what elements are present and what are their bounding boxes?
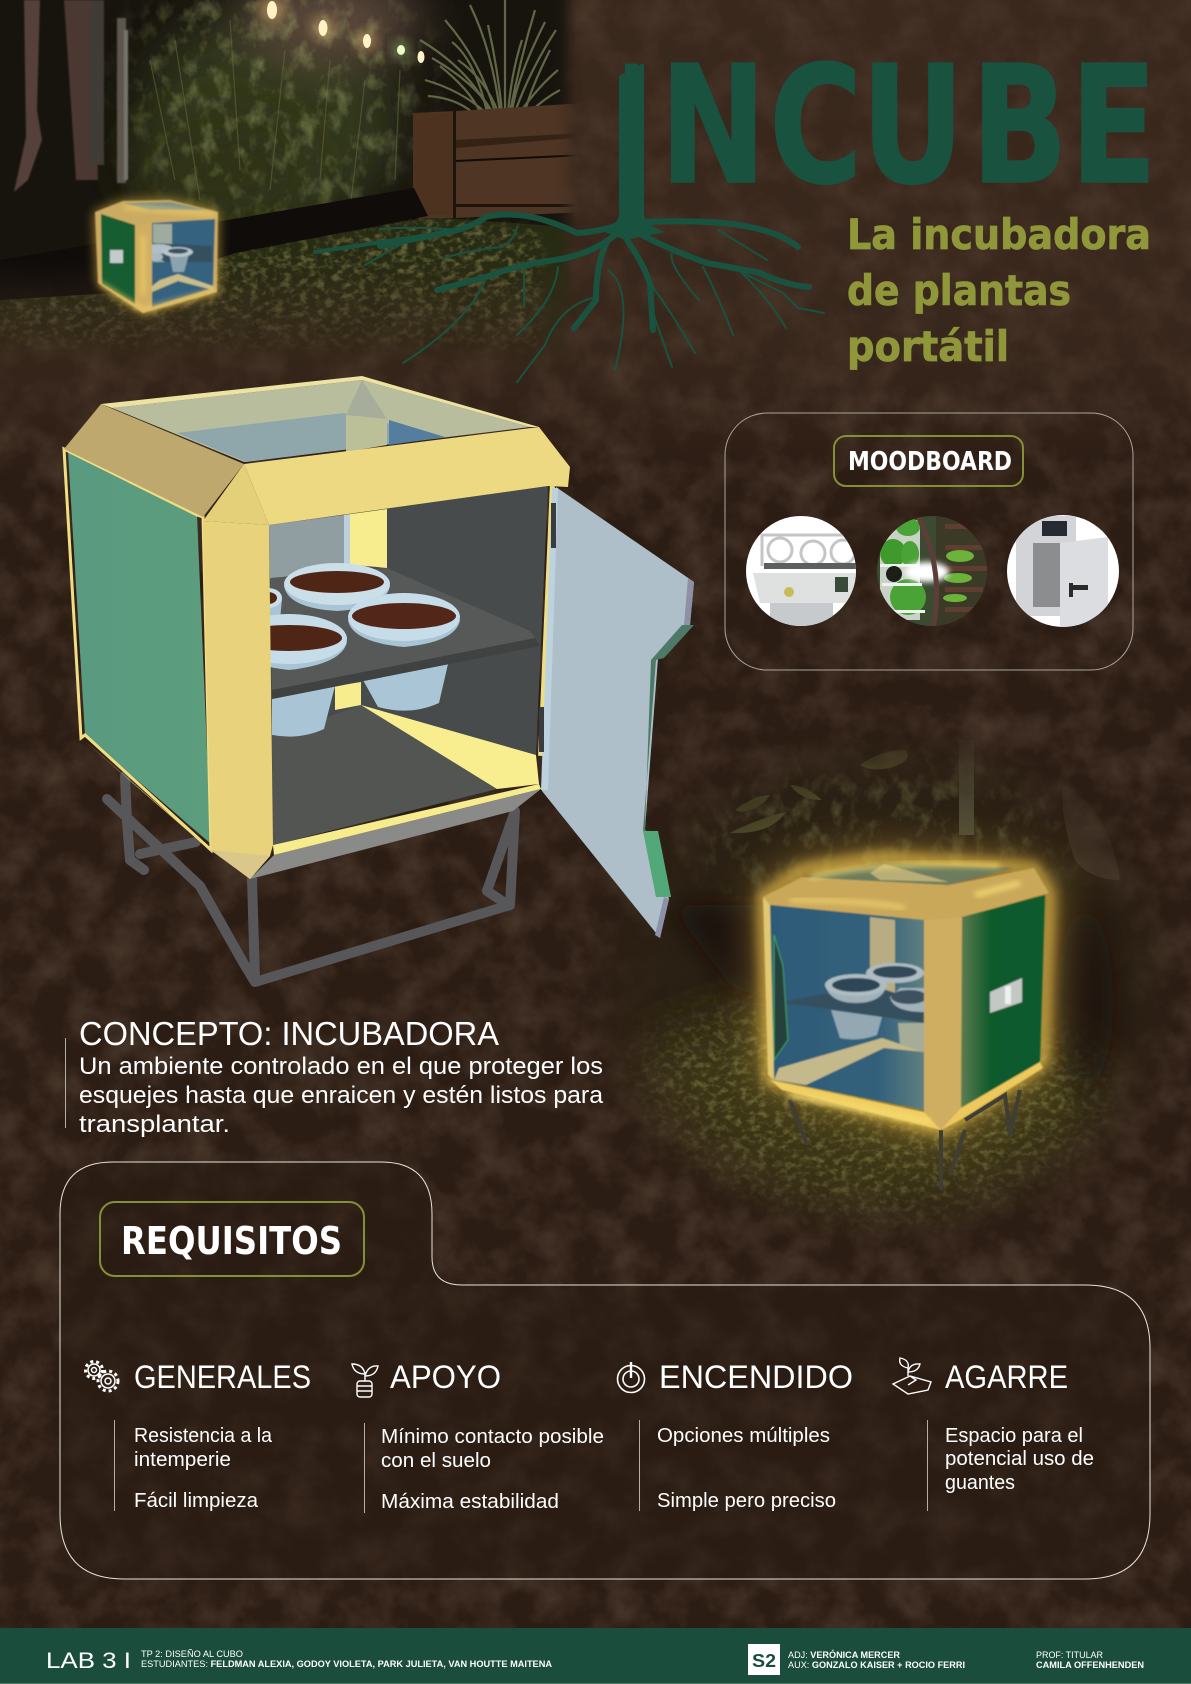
column: generales: GENERALES bbox=[134, 1359, 311, 1395]
subtitle: La incubadora bbox=[847, 210, 1151, 259]
teaching assistants: ADJ: VERÓNICA MERCER bbox=[788, 1649, 900, 1660]
door bbox=[541, 487, 694, 938]
shelf bbox=[270, 568, 541, 699]
column: generales: Resistencia a la bbox=[134, 1425, 273, 1447]
title: I bbox=[619, 27, 644, 219]
column: agarre: AGARRE bbox=[945, 1359, 1068, 1395]
subtitle bbox=[847, 210, 1151, 371]
small glowing cube in garden bbox=[95, 200, 218, 313]
requisitos label: REQUISITOS bbox=[121, 1219, 342, 1263]
hinges bbox=[539, 503, 556, 752]
column: encendido bbox=[618, 1359, 853, 1512]
photo: garden at night with small glowing cube bbox=[0, 0, 574, 347]
front post bbox=[203, 521, 273, 879]
title: NCUBE bbox=[660, 31, 1157, 221]
requisitos label bbox=[100, 1202, 364, 1276]
concept text block: Un ambiente controlado en el que proteger los bbox=[79, 1053, 603, 1080]
icon: hand holding plant bbox=[893, 1358, 931, 1394]
column: encendido: Opciones múltiples bbox=[657, 1425, 830, 1447]
metal stand bbox=[107, 776, 515, 982]
column: apoyo: con el suelo bbox=[381, 1450, 491, 1472]
panel: requisitos bbox=[60, 1162, 1150, 1579]
moodboard label bbox=[834, 436, 1023, 486]
column: apoyo: Máxima estabilidad bbox=[381, 1491, 559, 1513]
course label: LAB 3 I bbox=[46, 1648, 131, 1673]
interior back and walls bbox=[269, 486, 548, 845]
frame front corner bbox=[203, 464, 269, 525]
head professor: CAMILA OFFENHENDEN bbox=[1036, 1660, 1144, 1670]
column: generales bbox=[86, 1359, 311, 1512]
badge S2: S2 bbox=[752, 1651, 776, 1671]
door handle strip bbox=[643, 625, 694, 897]
column: agarre: guantes bbox=[945, 1472, 1015, 1494]
interior floor bbox=[272, 705, 497, 845]
concept text block bbox=[65, 1015, 604, 1138]
column: apoyo: Mínimo contacto posible bbox=[381, 1426, 604, 1448]
root logo: stem of the I and roots bbox=[315, 63, 824, 382]
foliage stems bbox=[150, 20, 400, 210]
project and students bbox=[141, 1649, 553, 1669]
pots lower bodies bbox=[272, 664, 448, 737]
pots with soil bbox=[231, 563, 460, 670]
column: encendido: ENCENDIDO bbox=[659, 1359, 853, 1395]
moodboard label: MOODBOARD bbox=[848, 447, 1012, 477]
subtitle: portátil bbox=[847, 322, 1009, 371]
icon: power button bbox=[618, 1362, 644, 1392]
subtitle: de plantas bbox=[847, 266, 1071, 315]
wooden planter bbox=[413, 103, 585, 218]
head professor bbox=[1036, 1650, 1144, 1670]
frame chamfer left bbox=[64, 404, 244, 517]
photo: night grass with glowing cube bbox=[630, 749, 1156, 1231]
moodboard panel bbox=[725, 413, 1133, 670]
moodboard image: vertical hydroponic drum bbox=[877, 516, 988, 628]
ornamental grass bbox=[420, 0, 560, 112]
black garden edging bbox=[0, 188, 428, 300]
main 3D incubator render bbox=[64, 376, 694, 982]
moodboard image: neonatal incubator bbox=[746, 516, 856, 627]
project and students: TP 2: DISEÑO AL CUBO bbox=[141, 1649, 243, 1659]
background plant bbox=[730, 748, 974, 835]
column: generales: Fácil limpieza bbox=[134, 1490, 259, 1512]
string lights bbox=[258, 0, 424, 63]
column: apoyo: APOYO bbox=[390, 1359, 501, 1395]
column: generales: intemperie bbox=[134, 1449, 231, 1471]
shadow behind cube bbox=[675, 896, 762, 1004]
cube pots bbox=[825, 963, 927, 1052]
badge S2 bbox=[748, 1644, 780, 1675]
cube legs bbox=[790, 1090, 1020, 1190]
concept text block: esquejes hasta que enraicen y estén listos para bbox=[79, 1082, 604, 1109]
bottom rim and underside bbox=[273, 784, 541, 855]
left green panel bbox=[68, 452, 211, 844]
glass roof bbox=[112, 380, 530, 462]
footer band bbox=[0, 1628, 1191, 1684]
concept text block: transplantar. bbox=[79, 1111, 230, 1138]
column: encendido: Simple pero preciso bbox=[657, 1490, 836, 1512]
moodboard image: laboratory oven bbox=[1006, 514, 1120, 628]
concept text block: CONCEPTO: INCUBADORA bbox=[79, 1015, 499, 1052]
large leaf bbox=[1063, 804, 1120, 880]
trunks and pipe bbox=[14, 0, 128, 192]
column: apoyo bbox=[352, 1359, 604, 1513]
teaching assistants bbox=[788, 1649, 965, 1670]
column: agarre bbox=[893, 1358, 1094, 1511]
column: agarre: Espacio para el bbox=[945, 1425, 1083, 1447]
column: agarre: potencial uso de bbox=[945, 1448, 1094, 1470]
icon: seedling in pot bbox=[352, 1364, 378, 1397]
frame top bar bbox=[244, 427, 570, 525]
project and students: ESTUDIANTES: FELDMAN ALEXIA, GODOY VIOLETA, PARK JULIETA, VAN HOUTTE MAITENA bbox=[141, 1659, 553, 1669]
head professor: PROF: TITULAR bbox=[1036, 1650, 1103, 1660]
large glowing cube on grass bbox=[763, 858, 1113, 1190]
icon: gears bbox=[86, 1362, 118, 1391]
teaching assistants: AUX: GONZALO KAISER + ROCIO FERRI bbox=[788, 1660, 965, 1670]
